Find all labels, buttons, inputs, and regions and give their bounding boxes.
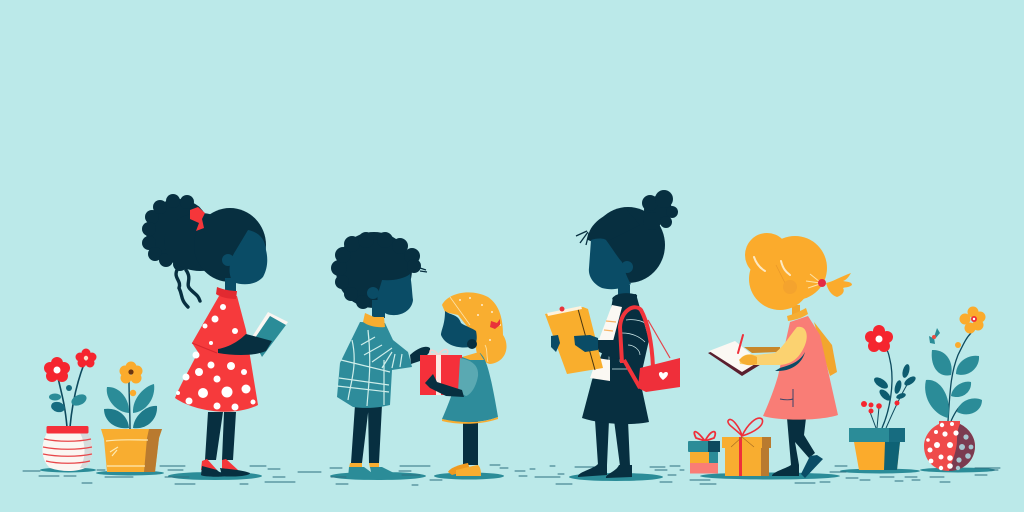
hair [588,190,678,283]
sleeve [458,358,478,396]
near arm and hand [740,327,807,365]
shoes [201,459,217,470]
hair [142,194,266,282]
legs [351,405,382,463]
hair bow [190,207,205,231]
folder [545,306,603,374]
face [377,274,413,315]
ground dashes and shadows [23,465,1000,485]
plant: polka-dot vase with orange flower [924,306,986,471]
gift box [420,349,462,395]
neck and collar [792,305,800,315]
shoes [772,465,799,476]
dress [175,296,258,412]
sweater [337,322,412,408]
hand [410,347,430,364]
plant: striped vase with red flowers [42,348,96,471]
plant: orange pot with yellow flower [101,362,162,472]
hair and head [745,233,852,310]
child: girl with folder and red bag [545,190,680,478]
face [589,238,631,289]
child: boy with plaid sweater [331,232,430,478]
hair [331,232,421,309]
arm and hand [425,374,464,397]
child: girl in red dress reading [142,194,288,477]
far arm [744,347,780,353]
plant: teal pot with red flower [849,325,917,470]
legs [205,412,236,460]
face [230,230,267,284]
notebook [708,335,763,376]
hair flower [490,319,500,329]
arm and hand [218,334,272,355]
hair [442,292,507,364]
butterfly [929,328,940,344]
child: small girl holding gift [420,292,507,476]
ponytail [826,273,852,297]
backpack strap [814,322,837,376]
legs [595,420,630,466]
gift: large orange box with red ribbon [722,418,771,476]
book [250,312,288,357]
skirt and jacket [582,294,649,424]
white shirt and scarf [590,358,610,381]
dress [763,316,838,420]
legs [787,418,815,465]
hands [551,335,560,352]
arm [595,340,628,360]
bag with straps [620,307,680,392]
collar [363,313,385,327]
shoes [348,467,375,478]
gift: small stacked gift [688,432,720,474]
dress [442,353,498,422]
shoes [448,463,470,475]
face [441,311,477,348]
child: blonde girl writing in notebook [708,233,852,478]
shoes [578,464,607,477]
socks [349,463,379,468]
leg [463,420,478,465]
ear [783,280,797,294]
